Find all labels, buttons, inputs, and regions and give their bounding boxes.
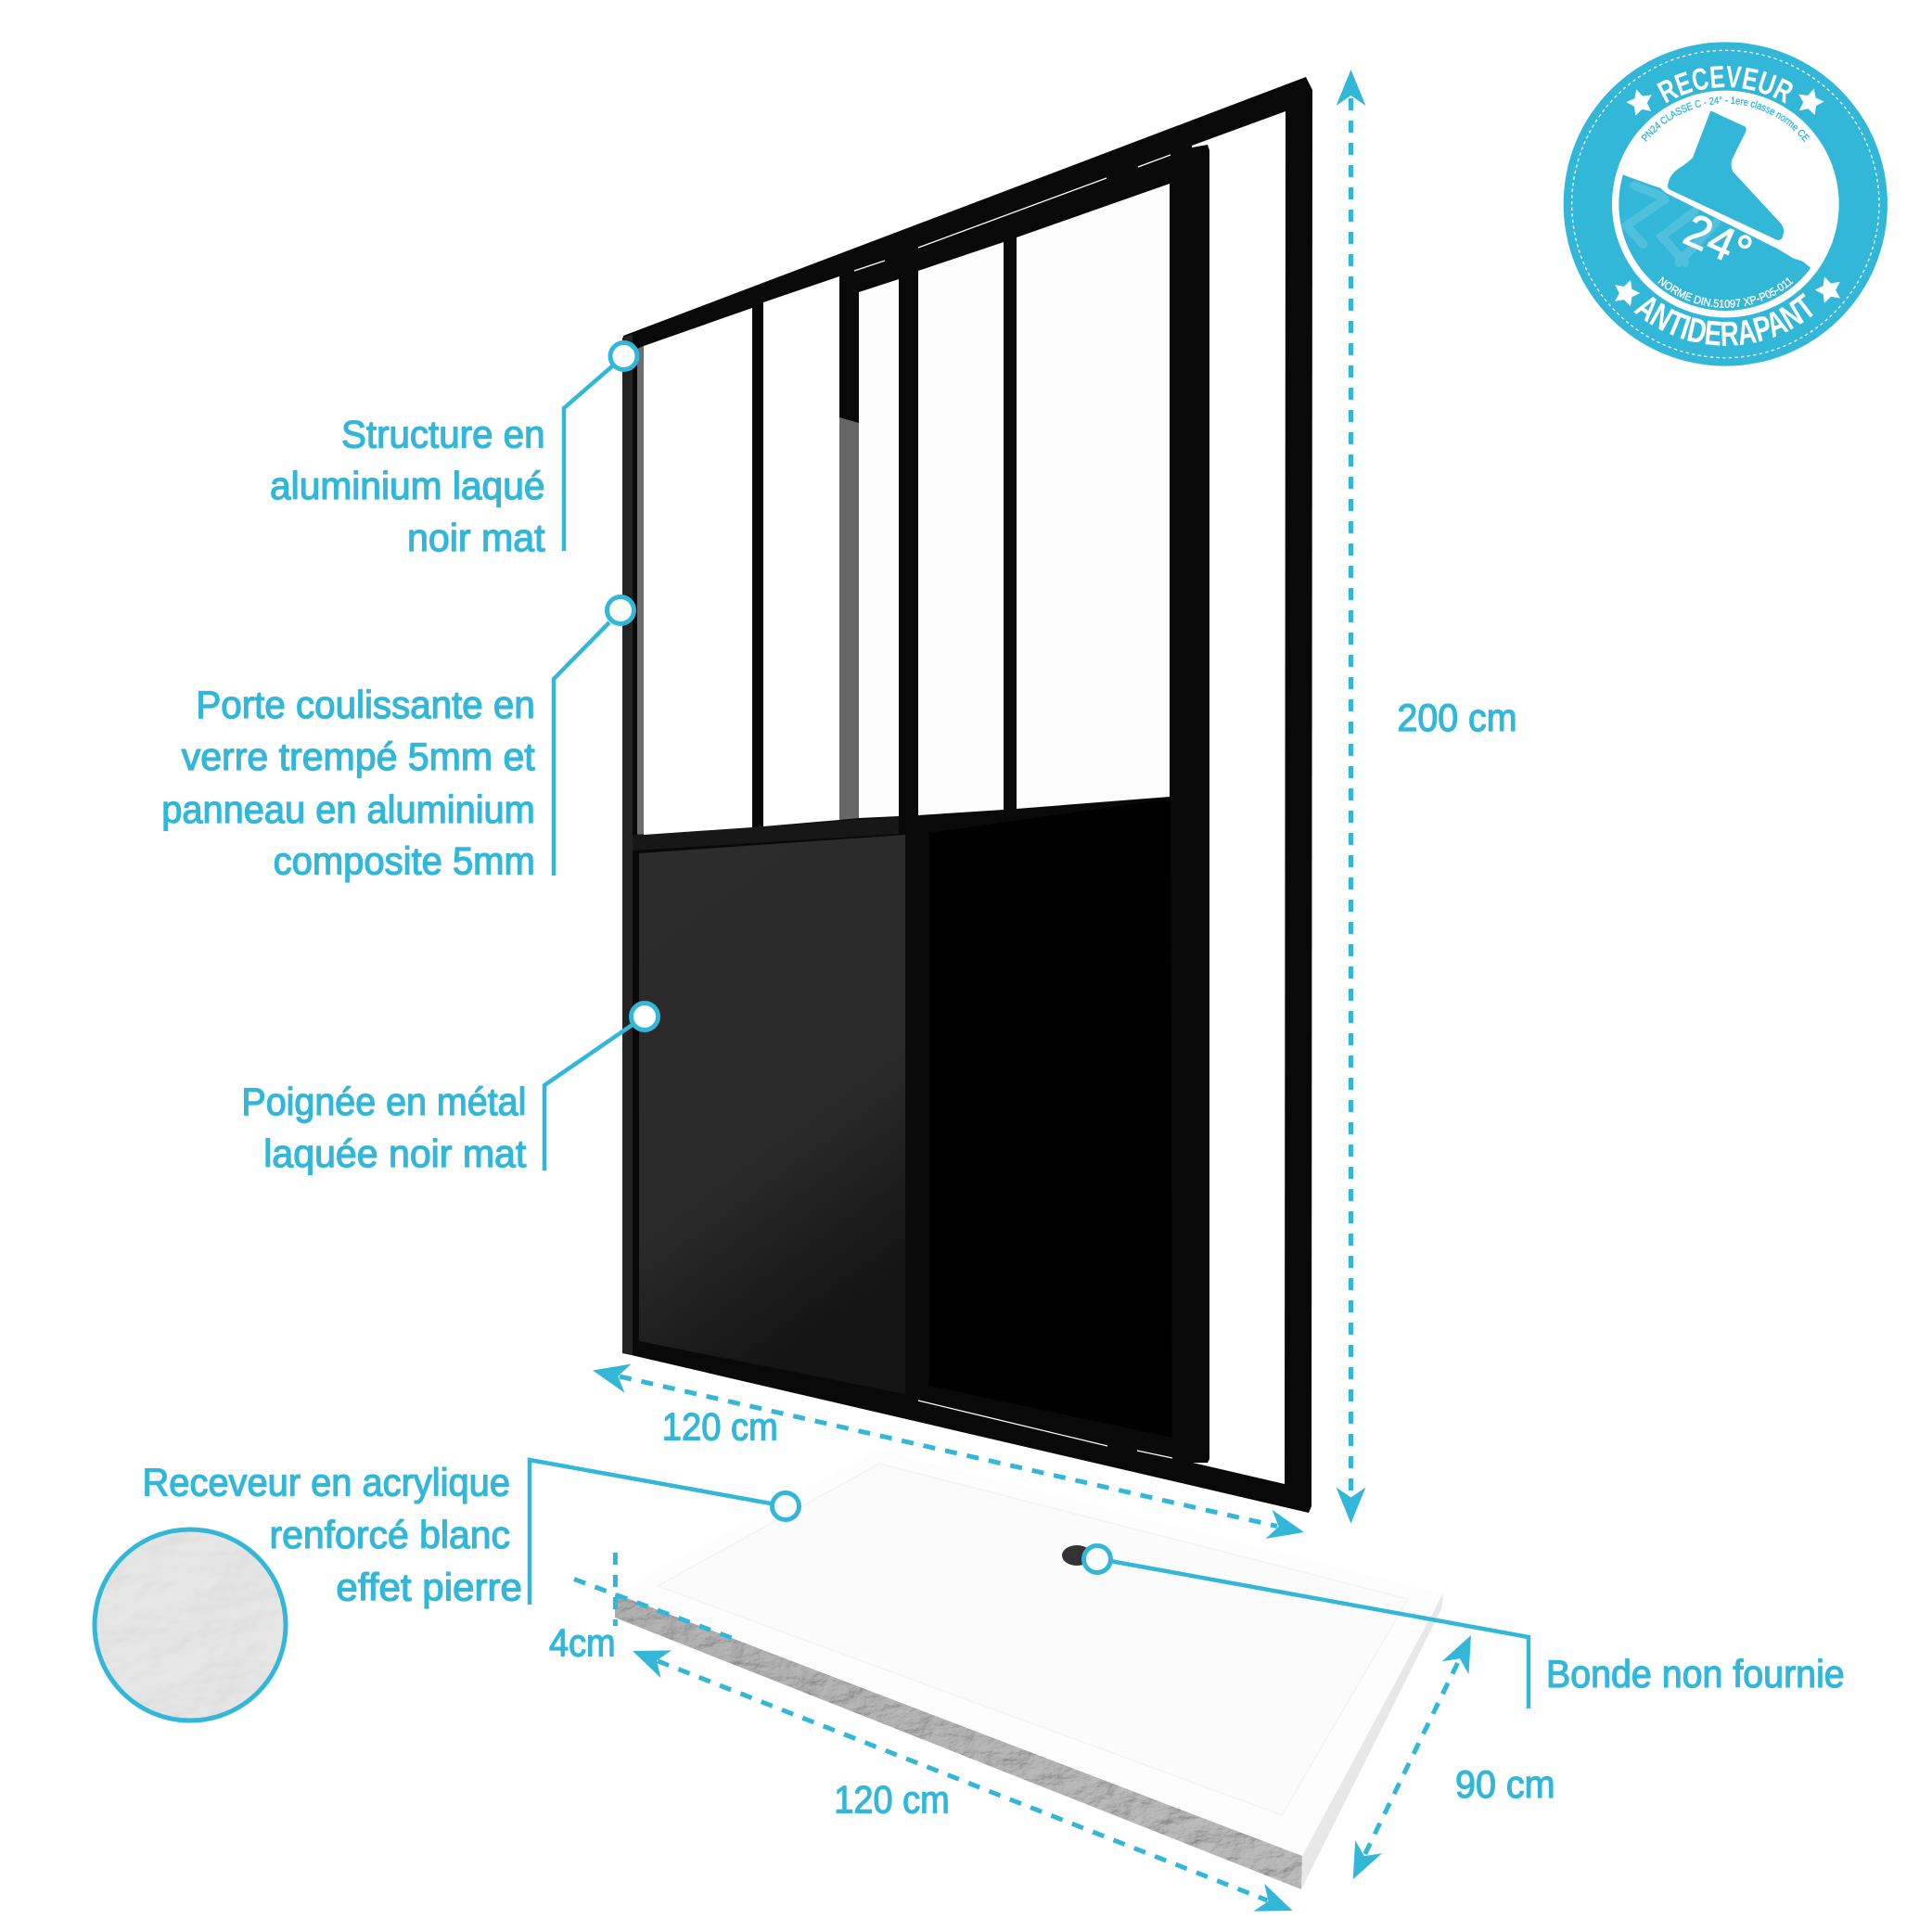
label: 120 cm (834, 1777, 950, 1821)
glass pane 4 (918, 242, 1004, 815)
vertical dashed guide (613, 1553, 618, 1626)
label: laquée noir mat (263, 1132, 527, 1175)
badge disc (1564, 42, 1887, 366)
label: 90 cm (1455, 1762, 1555, 1806)
arrowhead top (1442, 1629, 1484, 1674)
callout: receveur acrylique (143, 1460, 800, 1609)
label: panneau en aluminium (161, 787, 535, 831)
glass pane 3 (859, 279, 899, 818)
marker (607, 597, 634, 623)
icon: foot (1668, 110, 1784, 240)
label: composite 5mm (274, 838, 535, 883)
arrowhead bottom (1336, 1488, 1365, 1523)
label: noir mat (407, 516, 545, 559)
marker (610, 343, 637, 369)
sliding lower panel (929, 799, 1172, 1438)
dimension: tray width 90 cm (1339, 1629, 1555, 1886)
stone texture swatch (93, 1528, 288, 1722)
tray side face (1301, 1593, 1443, 1889)
arrowhead bottom (1339, 1840, 1382, 1886)
dimension: thickness 4cm (549, 1553, 732, 1665)
arrowhead left (589, 1356, 632, 1393)
shower tray (615, 1450, 1443, 1889)
label (270, 412, 545, 559)
label: Poignée en métal (241, 1080, 526, 1123)
shower door (622, 77, 1312, 1513)
angle value: 24° (1677, 204, 1759, 278)
label: Bonde non fournie (1546, 1652, 1845, 1695)
fixed lower panel (639, 835, 905, 1394)
badge: receveur antiderapant (1564, 42, 1887, 366)
front face stone texture (615, 1593, 1302, 1889)
label (161, 683, 535, 883)
swatch ring (95, 1529, 286, 1721)
label: 200 cm (1397, 696, 1517, 739)
swatch fill (93, 1528, 288, 1722)
label (143, 1461, 522, 1609)
dashed line (658, 1661, 1268, 1900)
label: 120 cm (662, 1404, 778, 1448)
tray top surface (615, 1450, 1443, 1856)
arrowhead right (1265, 1510, 1308, 1547)
dimension: door width 120 cm (589, 1356, 1308, 1547)
label: 4cm (549, 1621, 616, 1665)
track highlights (854, 155, 1172, 1458)
norm text: NORME DIN.51097 XP-P05-011 (1657, 276, 1794, 308)
leader line (1110, 1561, 1529, 1708)
callout: bonde (1083, 1545, 1845, 1708)
stars (1610, 85, 1845, 308)
dashed line (1365, 1660, 1459, 1854)
right opening (1193, 111, 1286, 1484)
label (241, 1080, 527, 1175)
leader line (530, 1460, 771, 1605)
glass pane 2 (763, 276, 839, 826)
heading bottom: ANTIDERAPANT (1633, 293, 1813, 346)
class text: PN24 CLASSE C - 24° - 1ere classe norme CE (1641, 96, 1810, 143)
label: aluminium laqué (270, 464, 545, 507)
marker (772, 1493, 800, 1519)
label: verre trempé 5mm et (182, 735, 535, 778)
label: Porte coulissante en (196, 683, 535, 726)
arrowhead left (627, 1637, 672, 1678)
callout: structure (270, 343, 637, 559)
gap above rear panel (1192, 139, 1209, 150)
dimension: tray length 120 cm (627, 1637, 1298, 1925)
marker (631, 1004, 659, 1030)
leader line (544, 1024, 633, 1171)
arrowhead right (1253, 1884, 1298, 1925)
drain (1062, 1545, 1092, 1566)
glass pane 5 (1017, 184, 1170, 809)
leader line (554, 622, 609, 876)
marker (1083, 1545, 1111, 1573)
callout: porte coulissante (161, 597, 634, 883)
arrowhead top (1336, 70, 1365, 106)
dotted ring (1572, 50, 1879, 358)
label: renforcé blanc (269, 1513, 510, 1556)
heading top: RECEVEUR (1657, 65, 1793, 104)
dashed line (620, 1376, 1277, 1527)
callout: poignee (241, 1004, 659, 1175)
dashed line (1349, 98, 1353, 1497)
tray basin (658, 1464, 1408, 1815)
non-slip surface (1619, 174, 1810, 311)
dimension: height 200 cm (1336, 70, 1517, 1523)
leader line (564, 365, 613, 551)
label: Receveur en acrylique (143, 1461, 510, 1504)
black outer frame (623, 77, 1312, 1513)
mid rail, fixed panel (633, 817, 899, 851)
diagonal dashed guide (574, 1579, 732, 1638)
rear stile reflection (839, 417, 859, 820)
tray front face (615, 1593, 1302, 1889)
inner white disc (1612, 91, 1839, 317)
left stile shading (622, 334, 644, 1355)
glass pane 1 (644, 308, 752, 835)
label: Structure en (341, 412, 545, 456)
label: effet pierre (336, 1566, 522, 1609)
